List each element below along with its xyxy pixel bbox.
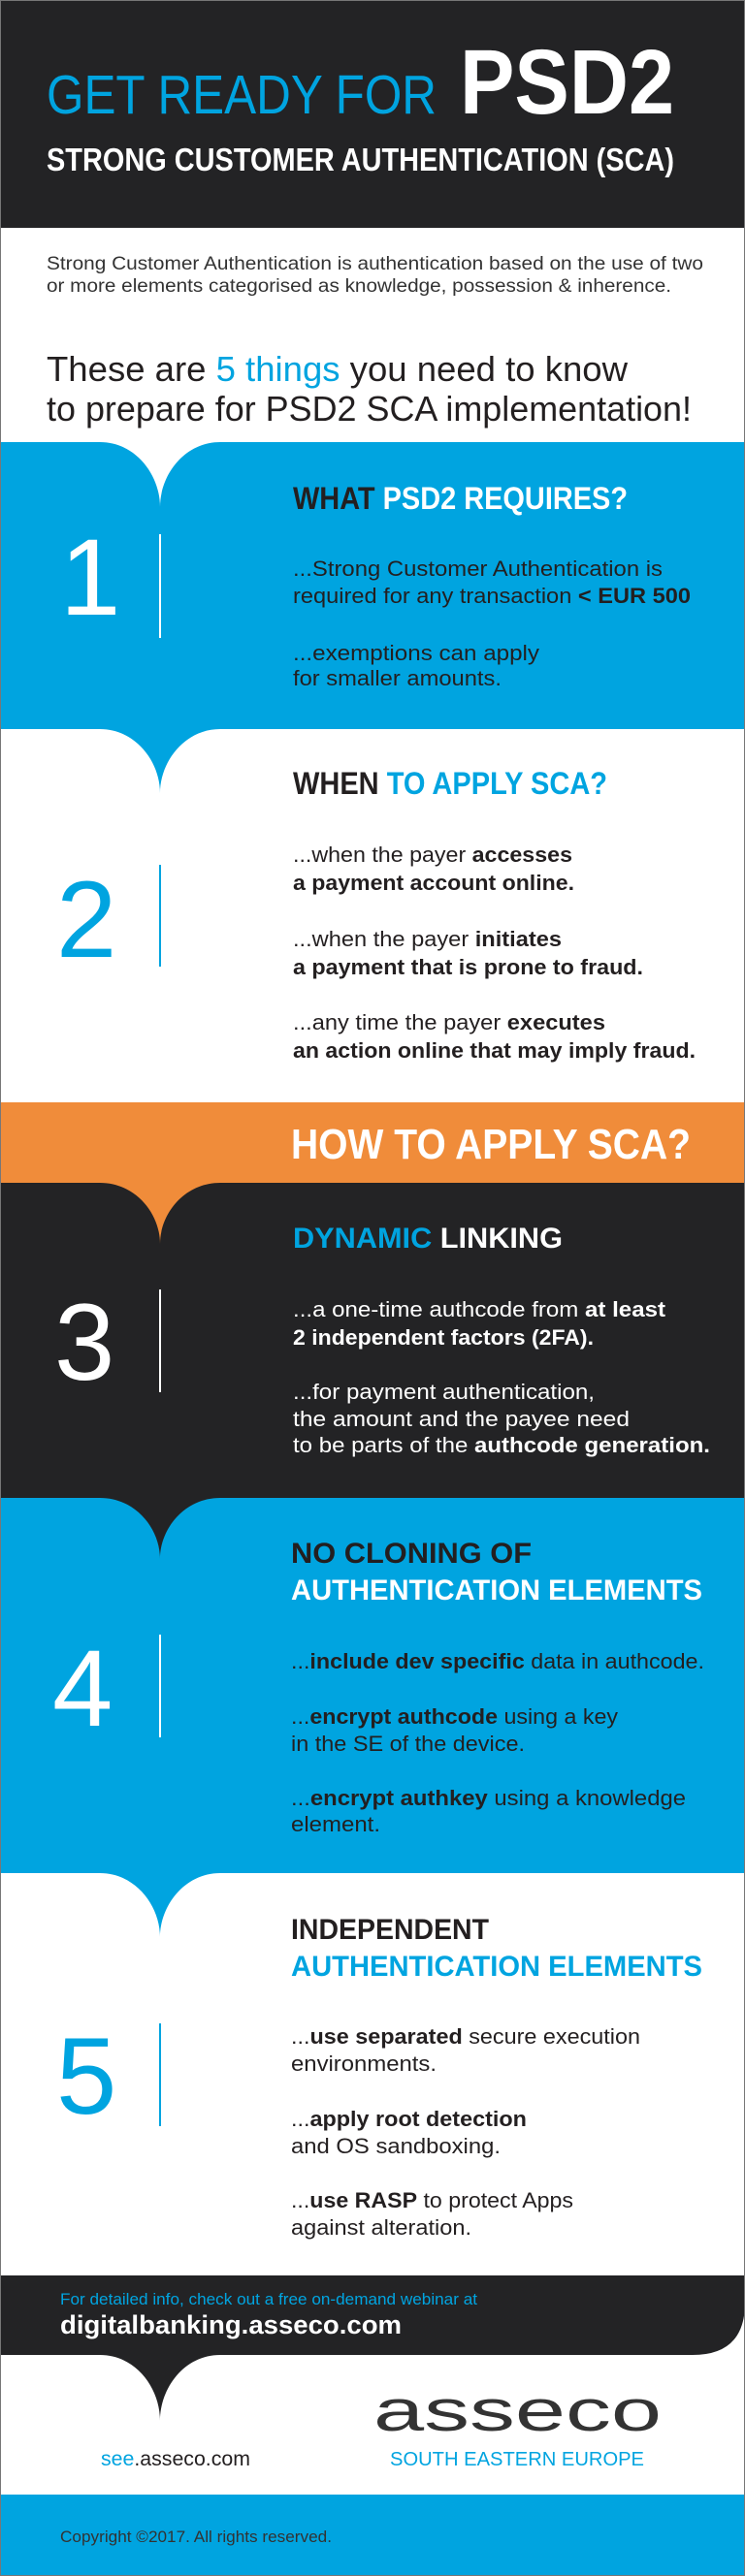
- body 5: and OS sandboxing.: [291, 2134, 501, 2158]
- copyright band: Copyright ©2017. All rights reserved.: [60, 2528, 332, 2546]
- body 3: to be parts of the authcode generation.: [293, 1433, 710, 1457]
- intro heading: to prepare for PSD2 SCA implementation!: [47, 389, 692, 429]
- intro heading: These are 5 things you need to know: [47, 349, 629, 389]
- panel: 3 dynamic linking: [0, 1183, 745, 1499]
- subtitle: STRONG CUSTOMER AUTHENTICATION (SCA): [47, 142, 674, 177]
- heading 5: AUTHENTICATION ELEMENTS: [291, 1951, 702, 1983]
- banner: how to apply SCA: [0, 1102, 745, 1184]
- body 2: [293, 843, 696, 1063]
- body 1: ...exemptions can apply: [293, 641, 539, 665]
- intro text: Strong Customer Authentication is authentication based on the use of two: [47, 254, 703, 274]
- body 3: [293, 1297, 710, 1457]
- number 3: 3: [54, 1282, 114, 1403]
- footer: webinar callout: For detailed info, check out a free on-demand webinar at: [60, 2290, 477, 2308]
- body 4: [291, 1649, 704, 1836]
- panel: 4 no cloning: [0, 1498, 745, 1874]
- body 1: [293, 557, 691, 690]
- footer: webinar callout: [0, 2275, 745, 2421]
- heading 5: [291, 1914, 702, 1983]
- body 5: against alteration.: [291, 2215, 471, 2240]
- intro text: [47, 254, 703, 297]
- body 4: ...encrypt authcode using a key: [291, 1704, 618, 1729]
- panel: 5 independent elements: [0, 1873, 745, 2276]
- footer: webinar callout: digitalbanking.asseco.com: [60, 2310, 402, 2339]
- title: PSD2: [460, 31, 674, 134]
- body 5: ...use RASP to protect Apps: [291, 2188, 573, 2212]
- logo: asseco: SOUTH EASTERN EUROPE: [390, 2449, 644, 2470]
- title: [47, 31, 674, 134]
- body 4: element.: [291, 1812, 380, 1836]
- body 5: ...use separated secure execution: [291, 2024, 640, 2049]
- heading 4: [291, 1538, 702, 1606]
- body 4: ...include dev specific data in authcode.: [291, 1649, 704, 1673]
- banner: how to apply SCA: HOW TO APPLY SCA?: [291, 1121, 691, 1168]
- body 4: in the SE of the device.: [291, 1732, 525, 1756]
- number 2: 2: [56, 859, 116, 980]
- heading 4: AUTHENTICATION ELEMENTS: [291, 1574, 702, 1606]
- body 2: ...any time the payer executes: [293, 1010, 605, 1034]
- logo: asseco: [373, 2378, 662, 2470]
- body 3: 2 independent factors (2FA).: [293, 1325, 594, 1350]
- heading 2: WHEN TO APPLY SCA?: [293, 766, 607, 801]
- heading 1: WHAT PSD2 REQUIRES?: [293, 481, 628, 516]
- heading 4: NO CLONING OF: [291, 1538, 532, 1570]
- number 5: 5: [56, 2016, 116, 2137]
- body 4: ...encrypt authkey using a knowledge: [291, 1786, 686, 1810]
- website link: see.asseco.com: [101, 2448, 250, 2470]
- body 5: environments.: [291, 2051, 437, 2076]
- body 3: ...a one-time authcode from at least: [293, 1297, 666, 1321]
- copyright band: [0, 2495, 745, 2576]
- heading 3: DYNAMIC LINKING: [293, 1223, 563, 1255]
- body 2: a payment that is prone to fraud.: [293, 955, 643, 979]
- body 1: required for any transaction < EUR 500: [293, 584, 691, 608]
- body 2: a payment account online.: [293, 871, 574, 895]
- header panel: [0, 0, 745, 228]
- intro heading: [47, 349, 692, 429]
- logo: asseco: asseco: [373, 2378, 662, 2443]
- body 2: an action online that may imply fraud.: [293, 1038, 696, 1063]
- panel: 2 when to apply: [0, 729, 745, 1102]
- intro text: or more elements categorised as knowledge, possession & inherence.: [47, 276, 671, 297]
- number 1: 1: [60, 517, 120, 638]
- body 3: the amount and the payee need: [293, 1407, 630, 1431]
- panel: 1 what PSD2 requires: [0, 442, 745, 730]
- body 5: [291, 2024, 640, 2240]
- title: GET READY FOR: [47, 64, 437, 126]
- body 3: ...for payment authentication,: [293, 1380, 595, 1404]
- number 4: 4: [52, 1628, 113, 1749]
- body 2: ...when the payer initiates: [293, 927, 562, 951]
- body 1: ...Strong Customer Authentication is: [293, 557, 663, 581]
- body 1: for smaller amounts.: [293, 666, 502, 690]
- body 5: ...apply root detection: [291, 2107, 527, 2131]
- heading 5: INDEPENDENT: [291, 1914, 489, 1946]
- body 2: ...when the payer accesses: [293, 843, 572, 867]
